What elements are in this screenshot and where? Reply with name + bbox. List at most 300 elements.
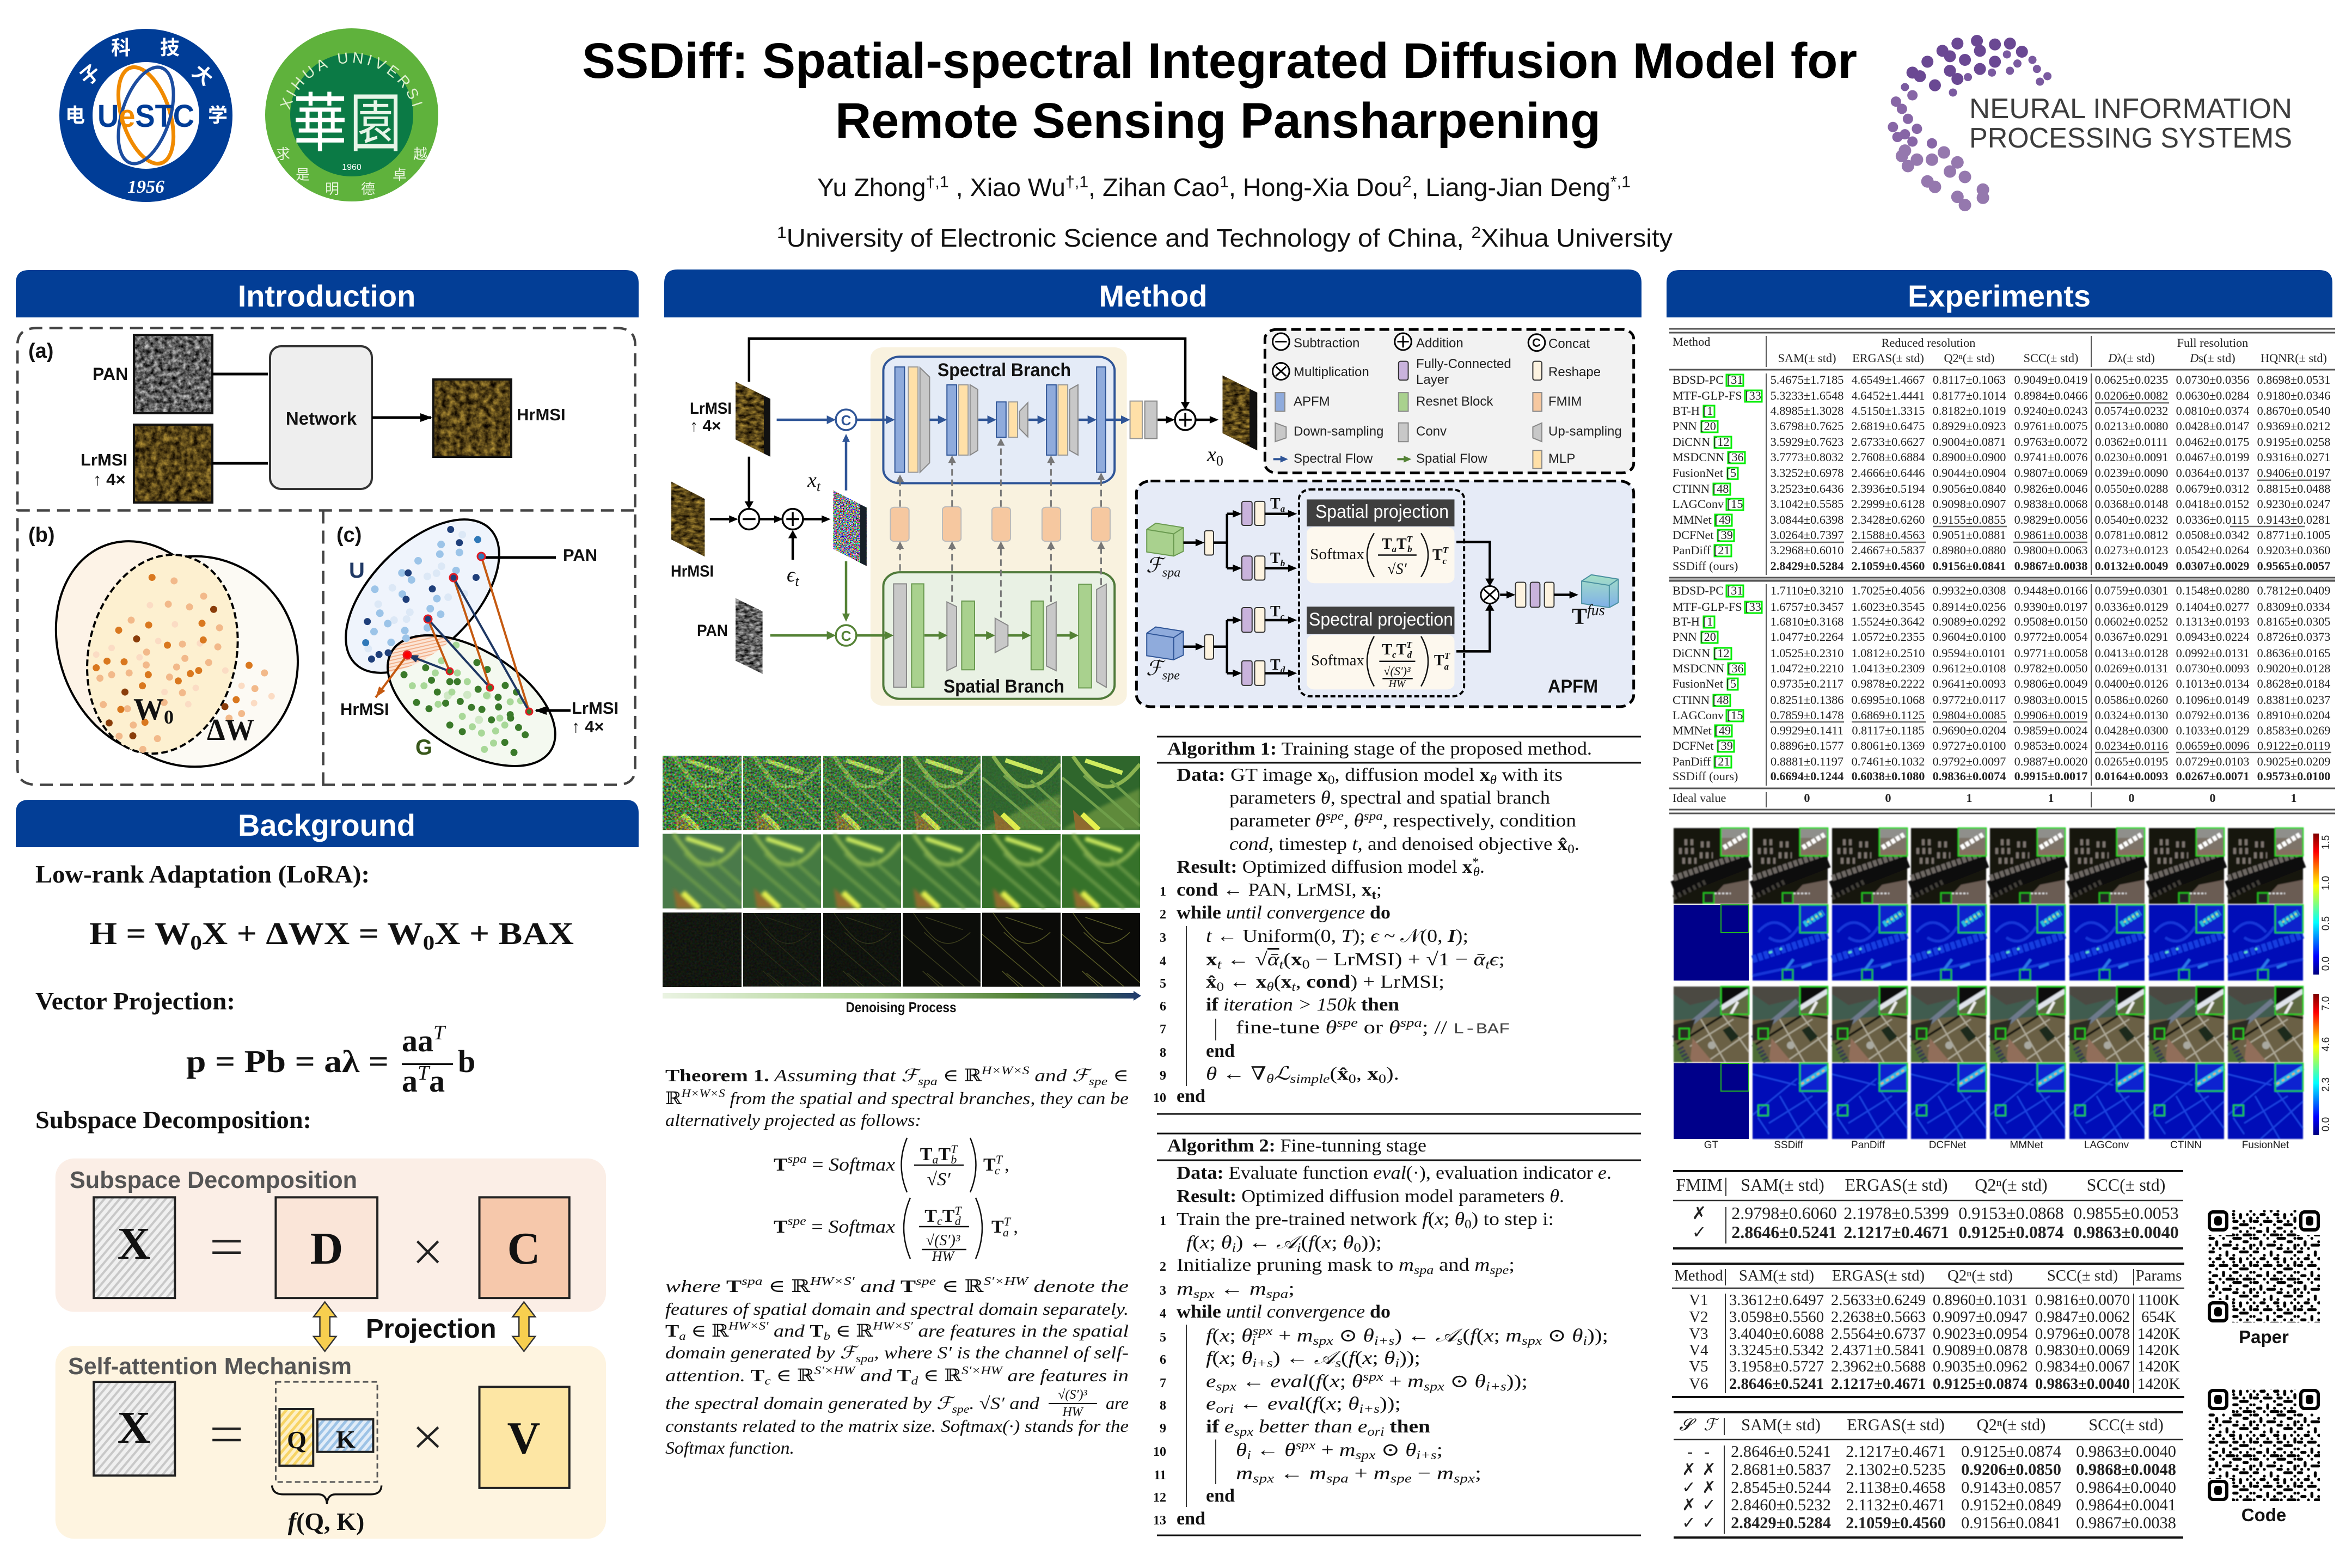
- table: reduced and full resolution results (GF2): 0.8165±0.0305: [2257, 615, 2330, 628]
- Algorithm 2: i: [1583, 1334, 1587, 1347]
- Algorithm 2: i+s: [1252, 1356, 1273, 1370]
- legend box: [1265, 329, 1634, 473]
- logo: Xihua University: 求: [276, 143, 290, 163]
- architecture text labels: APFM: [1294, 394, 1330, 409]
- table: reduced and full resolution results (WV3): 0.9044±0.0904: [1933, 466, 2006, 480]
- table: reduced and full resolution results (WV3): 0.9800±0.0063: [2014, 543, 2087, 557]
- table: variants V1-V6: 3.0598±0.5560: [1729, 1308, 1824, 1326]
- table: reduced and full resolution results (WV3): MSDCNN [36: [1673, 450, 1744, 464]
- table: reduced and full resolution results (WV3): 2.6733±0.6627: [1852, 435, 1925, 449]
- table: reduced and full resolution results (GF2): 0.9641±0.0093: [1933, 677, 2006, 690]
- equations: T: [774, 1217, 788, 1237]
- table: reduced and full resolution results (WV3): 3.0264±0.7397: [1771, 528, 1843, 542]
- table: variants V1-V6: 2.4371±0.5841: [1831, 1342, 1926, 1359]
- Algorithm 2: (: [1341, 1348, 1349, 1368]
- table: reduced and full resolution results (GF2): 0.0943±0.0224: [2176, 630, 2249, 644]
- table: S and F ablation: 0.9206±0.0850: [1961, 1460, 2061, 1479]
- Algorithm 2: spx: [1252, 1324, 1273, 1338]
- table: reduced and full resolution results (GF2): PanDiff [21: [1673, 755, 1730, 768]
- text block: Theorem 1: Theorem 1. Assuming that ℱ: [665, 1065, 891, 1085]
- diagram: subspace decomposition vs self-attention: [56, 1159, 606, 1539]
- vector projection formula: T: [418, 1062, 431, 1085]
- architecture text labels: T: [1396, 536, 1407, 553]
- table: S and F ablation: Q2ⁿ(± std): [1977, 1416, 2045, 1434]
- diagram: subspace decomposition vs self-attention: X: [118, 1402, 150, 1453]
- text block: Theorem 1: HW×S′: [872, 1319, 913, 1332]
- LoRA formula: X + BAX: [434, 916, 574, 951]
- Algorithm 2: 3: [1160, 1284, 1166, 1298]
- logo: Xihua University: 越: [413, 143, 427, 163]
- table: reduced and full resolution results (WV3): 0.9861±0.0038: [2014, 528, 2087, 542]
- Algorithm 2: ) ←: [1273, 1348, 1314, 1368]
- Algorithm 1: end: [1206, 1041, 1235, 1061]
- architecture text labels: C: [841, 412, 852, 428]
- table: variants V1-V6: 0.9830±0.0069: [2035, 1342, 2130, 1359]
- text block: Theorem 1: b: [824, 1330, 830, 1343]
- table: S and F ablation: 2.8460±0.5232: [1731, 1496, 1831, 1514]
- table: reduced and full resolution results (WV3): 0.0418±0.0152: [2176, 497, 2249, 511]
- Algorithm 1: ←: [1224, 972, 1256, 992]
- text block: Theorem 1: alternatively projected as follows:: [665, 1110, 921, 1130]
- table: reduced and full resolution results (WV3): 4.6452±1.4441: [1852, 389, 1925, 402]
- table: reduced and full resolution results (WV3): 0.9195±0.0258: [2257, 435, 2330, 449]
- logo: NeurIPS: NEURAL INFORMATION: [1969, 93, 2292, 125]
- Algorithm 2: i: [1395, 1356, 1399, 1370]
- table: reduced and full resolution results (WV3): 0.0206±0.0082: [2095, 389, 2168, 402]
- method labels: FusionNet: [2242, 1140, 2289, 1151]
- table: variants V1-V6: 0.9816±0.0070: [2035, 1291, 2130, 1309]
- Algorithm 1: t: [1217, 958, 1222, 971]
- sub-panel (c): subspace projections: LrMSI: [572, 699, 618, 718]
- Algorithm 2: spx: [1193, 1287, 1215, 1301]
- table: variants V1-V6: 2.1217±0.4671: [1831, 1375, 1926, 1393]
- Algorithm 2: f(x; θ: [1186, 1233, 1230, 1253]
- table: reduced and full resolution results (WV3): 0.0574±0.0232: [2095, 404, 2168, 418]
- table: reduced and full resolution results (WV3): 0.0550±0.0288: [2095, 482, 2168, 495]
- table: reduced and full resolution results (GF2): 0.9772±0.0117: [1933, 693, 2006, 707]
- APFM box: [1136, 481, 1634, 707]
- table: reduced and full resolution results (GF2): 0.8881±0.1197: [1771, 755, 1843, 768]
- architecture text labels: Spectral Branch: [938, 360, 1071, 381]
- logo: UESTC: [59, 29, 232, 202]
- table: reduced and full resolution results (WV3): CTINN [48: [1673, 482, 1729, 495]
- Algorithm 1: or: [1358, 1018, 1389, 1038]
- table: reduced and full resolution results (GF2): 0.1013±0.0134: [2176, 677, 2249, 690]
- text block: Theorem 1: spa: [742, 1275, 763, 1288]
- Algorithm 1: ℒ: [1274, 1064, 1291, 1084]
- Algorithm 1: θ: [1354, 811, 1364, 831]
- Algorithm 1: t: [1291, 980, 1296, 994]
- vector projection formula: a: [402, 1063, 418, 1099]
- Algorithm 2: ←: [1236, 1371, 1271, 1392]
- Algorithm 2: f(x; m: [1470, 1326, 1519, 1346]
- equations: a: [1003, 1226, 1009, 1239]
- text block: Theorem 1: HW: [1062, 1405, 1084, 1419]
- logo: UESTC: 学: [208, 104, 228, 126]
- table: reduced and full resolution results (GF2): 1.0812±0.2510: [1852, 646, 1925, 660]
- authors: 1: [1220, 173, 1229, 191]
- Algorithm 2: f(x; θ: [1308, 1233, 1352, 1253]
- table: FMIM ablation: 0.9855±0.0053: [2073, 1203, 2179, 1223]
- architecture text labels: LrMSI: [690, 400, 732, 418]
- table: variants V1-V6: 3.4040±0.6088: [1729, 1325, 1824, 1343]
- table: reduced and full resolution results (WV3): 0.8771±0.1005: [2257, 528, 2330, 542]
- table: reduced and full resolution results (GF2): 0.9878±0.2222: [1852, 677, 1925, 690]
- Algorithm 1: t: [1279, 958, 1284, 971]
- text block: Theorem 1: attention. T: [665, 1365, 762, 1385]
- Algorithm 2: spe: [1490, 1263, 1509, 1277]
- architecture text labels: x: [807, 469, 817, 492]
- text block: Theorem 1: S′×HW: [983, 1275, 1030, 1288]
- table: FMIM ablation: ✓: [1692, 1222, 1706, 1242]
- Algorithm 2: θ: [1474, 1371, 1486, 1392]
- Algorithm 1: ,: [1296, 972, 1306, 992]
- architecture text labels: d: [1407, 650, 1412, 660]
- dashed skip connections: [896, 438, 1105, 617]
- equations: T: [920, 1144, 933, 1165]
- table: FMIM ablation: ERGAS(± std): [1845, 1175, 1948, 1195]
- table: variants V1-V6: 1100K: [2137, 1291, 2180, 1309]
- Algorithm 2: spx: [1295, 1438, 1316, 1452]
- Algorithm 2: ));: [1587, 1326, 1608, 1346]
- sub-panel (c): subspace projections: G: [415, 736, 432, 759]
- Algorithm 2: spx: [1522, 1334, 1542, 1347]
- architecture text labels: a: [1392, 544, 1397, 554]
- table: reduced and full resolution results (WV3): 0.9741±0.0076: [2014, 450, 2087, 464]
- text block: Theorem 1: ℝ: [665, 1088, 682, 1108]
- Algorithm 1: ;: [1499, 950, 1505, 970]
- table: reduced and full resolution results (GF2): 0.8726±0.0373: [2257, 630, 2330, 644]
- architecture text labels: T: [1407, 534, 1413, 544]
- table: reduced and full resolution results (GF2): 0.9929±0.1411: [1771, 724, 1843, 737]
- Algorithm 2: ) ←: [1236, 1233, 1276, 1253]
- table: FMIM ablation: ✗: [1692, 1203, 1706, 1223]
- architecture text labels: c: [1392, 650, 1396, 660]
- text block: Theorem 1: are features in the spatial: [913, 1321, 1129, 1340]
- architecture text labels: a: [1444, 661, 1449, 672]
- table: variants V1-V6: 0.9796±0.0078: [2035, 1325, 2130, 1343]
- table: reduced and full resolution results (WV3): Full resolution: [2177, 336, 2248, 350]
- table: reduced and full resolution results (WV3): HQNR(± std): [2261, 351, 2327, 365]
- table: reduced and full resolution results (GF2): 0.1033±0.0129: [2176, 724, 2249, 737]
- table: reduced and full resolution results (WV3): 0.0336±0.0115: [2176, 513, 2249, 526]
- table: FMIM ablation: [1673, 1171, 2183, 1248]
- table: reduced and full resolution results (GF2): 0.9772±0.0054: [2014, 630, 2087, 644]
- Algorithm 2: +: [1383, 1371, 1407, 1392]
- Algorithm 2: ←: [1251, 1440, 1284, 1460]
- logo: UESTC: 电: [65, 104, 85, 126]
- Algorithm 2: ⊙: [1333, 1326, 1363, 1346]
- architecture text labels: HW: [1388, 678, 1407, 690]
- text block: Theorem 1: HW×S′: [810, 1275, 855, 1288]
- Algorithm 2: s: [1457, 1334, 1462, 1347]
- table: reduced and full resolution results (GF2): DCFNet [39: [1673, 739, 1733, 752]
- table: S and F ablation: ✗: [1682, 1496, 1696, 1515]
- text block: Theorem 1: S′×HW: [814, 1364, 856, 1377]
- architecture text labels: t: [817, 479, 821, 494]
- Algorithm 2: and: [1434, 1255, 1474, 1275]
- table: variants V1-V6: [1672, 1264, 2184, 1397]
- table: reduced and full resolution results (GF2): 0.9735±0.2117: [1771, 677, 1843, 690]
- Algorithm 2: 8: [1160, 1399, 1166, 1413]
- colorbars: 0.0: [2320, 957, 2332, 971]
- method labels: MMNet: [2010, 1140, 2043, 1151]
- table: variants V1-V6: V5: [1689, 1358, 1708, 1375]
- Algorithm 2: ;: [1475, 1463, 1481, 1484]
- Algorithm 2: spe: [1391, 1472, 1412, 1485]
- table: reduced and full resolution results (GF2): 1.6810±0.3168: [1771, 615, 1843, 628]
- sub-panel (a): pansharpening pipeline: (a): [28, 340, 53, 363]
- table: S and F ablation: 𝓢: [1679, 1416, 1696, 1434]
- table: reduced and full resolution results (WV3): 0.0781±0.0812: [2095, 528, 2168, 542]
- table: S and F ablation: 2.8646±0.5241: [1731, 1442, 1831, 1461]
- sub-panel (c): subspace projections: ↑ 4×: [572, 717, 604, 736]
- Algorithm 1: x: [1256, 972, 1267, 992]
- Algorithm 1: cond ) + LrMSI;: [1306, 972, 1432, 992]
- table: reduced and full resolution results (GF2): 0.9448±0.0166: [2014, 584, 2087, 597]
- table: reduced and full resolution results (GF2): 0.0759±0.0301: [2095, 584, 2168, 597]
- colorbars: [2313, 834, 2332, 1135]
- table: variants V1-V6: SAM(± std): [1739, 1267, 1814, 1284]
- architecture text labels: b: [1281, 558, 1285, 568]
- Algorithm 2: i: [1297, 1241, 1301, 1254]
- table: reduced and full resolution results (WV3): 2.4666±0.6446: [1852, 466, 1925, 480]
- Algorithm 1: ϵ: [1490, 950, 1499, 970]
- table: reduced and full resolution results (GF2): 0.9932±0.0308: [1933, 584, 2006, 597]
- logo: Xihua University: 園: [350, 71, 402, 164]
- Algorithm 1: ; //: [1422, 1018, 1453, 1038]
- table: reduced and full resolution results (WV3): 3.2523±0.6436: [1771, 482, 1843, 495]
- table: variants V1-V6: 2.5633±0.6249: [1831, 1291, 1926, 1309]
- table: reduced and full resolution results (GF2): 0.9122±0.0119: [2257, 739, 2330, 752]
- equations: T: [951, 1142, 958, 1156]
- text block: Theorem 1: and: [855, 1365, 897, 1385]
- Algorithm 1: 5: [1160, 977, 1166, 991]
- table: reduced and full resolution results (WV3): 0.8670±0.0540: [2257, 404, 2330, 418]
- architecture text labels: b: [1407, 544, 1412, 554]
- table: S and F ablation: ✗: [1702, 1460, 1716, 1479]
- table: reduced and full resolution results (GF2): 0.8583±0.0269: [2257, 724, 2330, 737]
- table: reduced and full resolution results (WV3): 0.0467±0.0199: [2176, 450, 2249, 464]
- table: reduced and full resolution results (GF2): 0.9594±0.0101: [1933, 646, 2006, 660]
- Algorithm 2: i+s: [1374, 1334, 1394, 1347]
- Algorithm 1: 0: [1349, 1072, 1356, 1086]
- Algorithm 2: e: [1206, 1371, 1216, 1392]
- table: reduced and full resolution results (WV3): 0.9240±0.0243: [2014, 404, 2087, 418]
- table: reduced and full resolution results (GF2): MTF-GLP-FS [33: [1673, 600, 1761, 614]
- table: reduced and full resolution results (WV3): 0.0239±0.0090: [2095, 466, 2168, 480]
- Algorithm 2: 𝒜: [1276, 1233, 1303, 1253]
- table: variants V1-V6: 0.8960±0.1031: [1933, 1291, 2028, 1309]
- table: reduced and full resolution results (WV3): 4.5150±1.3315: [1852, 404, 1925, 418]
- table: S and F ablation: -: [1704, 1442, 1710, 1461]
- architecture text labels: fus: [1587, 602, 1605, 619]
- diagram: subspace decomposition vs self-attention: Self-attention Mechanism: [68, 1353, 352, 1380]
- architecture text labels: c: [1443, 556, 1447, 566]
- architecture text labels: Spatial Flow: [1416, 451, 1487, 466]
- table: reduced and full resolution results (WV3): 0.0508±0.0342: [2176, 528, 2249, 542]
- Algorithm 2: end: [1177, 1509, 1205, 1529]
- LoRA formula: 0: [423, 932, 434, 954]
- table: S and F ablation: 2.8681±0.5837: [1731, 1460, 1831, 1479]
- Algorithm 1: ,: [1356, 1064, 1367, 1084]
- table: FMIM ablation: 0.9863±0.0040: [2073, 1222, 2179, 1242]
- table: reduced and full resolution results (GF2): 0.0602±0.0252: [2095, 615, 2168, 628]
- Algorithm 2: m: [1339, 1440, 1356, 1460]
- LoRA formula: X + ΔWX = W: [202, 916, 423, 951]
- architecture text labels: T: [1572, 604, 1587, 629]
- table: reduced and full resolution results (WV3): 2.6819±0.6475: [1852, 419, 1925, 433]
- heading: Method: [664, 270, 1641, 317]
- Algorithm 1: 10: [1153, 1091, 1166, 1105]
- diagram: SSDiff architecture: [671, 329, 1634, 707]
- table: reduced and full resolution results (GF2): 0.9859±0.0024: [2014, 724, 2087, 737]
- diagram: subspace decomposition vs self-attention: X: [118, 1218, 150, 1269]
- table: reduced and full resolution results (GF2): MMNet [49: [1673, 724, 1731, 737]
- text block: Theorem 1: [665, 1064, 1129, 1457]
- architecture text labels: 0: [1216, 453, 1223, 469]
- sub-panel (b): LoRA weight sets: (b): [28, 524, 55, 547]
- architecture text labels: spe: [1162, 669, 1180, 683]
- Algorithm 2: ;: [1288, 1279, 1295, 1299]
- table: S and F ablation: ✗: [1702, 1478, 1716, 1497]
- table: reduced and full resolution results (GF2): 0.8628±0.0184: [2257, 677, 2330, 690]
- Algorithm 1: θ ← ∇: [1206, 1064, 1258, 1084]
- Algorithm 1: t: [1485, 958, 1490, 971]
- equations: T: [1004, 1215, 1012, 1228]
- table: reduced and full resolution results (GF2): 0: [1885, 791, 1891, 805]
- vector projection formula: b: [458, 1044, 475, 1079]
- table: S and F ablation: 0.9868±0.0048: [2076, 1460, 2176, 1479]
- table: reduced and full resolution results (GF2): 0.9803±0.0015: [2014, 693, 2087, 707]
- text block: Theorem 1: spa: [918, 1075, 938, 1088]
- Algorithm 1: spe: [1337, 1016, 1358, 1030]
- Algorithm 1: 0: [1217, 980, 1224, 994]
- Algorithm 2: +: [1273, 1326, 1297, 1346]
- Algorithm 2: ;: [1437, 1440, 1443, 1460]
- table: FMIM ablation: 2.8646±0.5241: [1731, 1222, 1837, 1242]
- table: reduced and full resolution results (WV3): 3.3252±0.6978: [1771, 466, 1843, 480]
- table: reduced and full resolution results (WV3): ERGAS(± std): [1852, 351, 1924, 365]
- table: reduced and full resolution results (WV3): 0.9369±0.0212: [2257, 419, 2330, 433]
- table: reduced and full resolution results (GF2): [1669, 578, 2335, 813]
- Algorithm 1: .: [1575, 834, 1579, 854]
- table: reduced and full resolution results (WV3): 0.9316±0.0271: [2257, 450, 2330, 464]
- table: reduced and full resolution results (WV3): 0.0428±0.0147: [2176, 419, 2249, 433]
- text block: Theorem 1: d: [911, 1374, 918, 1387]
- text block: Theorem 1: the spectral domain generated by ℱ: [665, 1393, 917, 1413]
- table: reduced and full resolution results (GF2): 1: [2290, 791, 2297, 805]
- text block: Theorem 1: ∈ ℝ: [918, 1365, 962, 1385]
- heading: Background: Background: [238, 808, 415, 842]
- Algorithm 2: ⊙: [1542, 1326, 1572, 1346]
- figure: denoising process grid: [661, 755, 1141, 1015]
- vector projection formula: aa: [402, 1023, 433, 1058]
- text block: Theorem 1: spe: [1089, 1075, 1107, 1088]
- Algorithm 2: θ: [1405, 1440, 1416, 1460]
- table: reduced and full resolution results (WV3): 0.9829±0.0056: [2014, 513, 2087, 526]
- architecture text labels: T: [1406, 640, 1412, 650]
- table: reduced and full resolution results (GF2): 0.8117±0.1185: [1852, 724, 1925, 737]
- Algorithm 1: cond, timestep t, and denoised objective x̂: [1229, 834, 1567, 854]
- table: reduced and full resolution results (WV3): 2.1588±0.4563: [1852, 528, 1925, 542]
- architecture text labels: Softmax: [1311, 652, 1364, 669]
- table: reduced and full resolution results (GF2): 0.9853±0.0024: [2014, 739, 2087, 752]
- table: reduced and full resolution results (GF2): 0.9727±0.0100: [1933, 739, 2006, 752]
- heading: Experiments: Experiments: [1908, 279, 2091, 313]
- logo: UESTC: 科: [111, 36, 131, 59]
- table: S and F ablation: 2.1138±0.4658: [1846, 1478, 1945, 1497]
- vector projection formula: p = Pb = aλ =: [186, 1044, 389, 1079]
- Algorithm 1: end: [1177, 1086, 1205, 1106]
- Algorithm 2: spx: [1313, 1334, 1334, 1347]
- table: reduced and full resolution results (GF2): 1.6757±0.3457: [1771, 600, 1843, 614]
- table: reduced and full resolution results (WV3): 0.9051±0.0881: [1933, 528, 2006, 542]
- table: S and F ablation: ✓: [1682, 1478, 1696, 1497]
- table: reduced and full resolution results (GF2): 0.9690±0.0204: [1933, 724, 2006, 737]
- table: reduced and full resolution results (GF2): 0.9915±0.0017: [2014, 769, 2087, 783]
- Algorithm 1: 0: [1328, 773, 1334, 787]
- table: reduced and full resolution results (WV3): 0.0364±0.0137: [2176, 466, 2249, 480]
- authors: 2: [1402, 173, 1412, 191]
- table: S and F ablation: ℱ: [1704, 1416, 1719, 1434]
- table: reduced and full resolution results (GF2): 0: [1804, 791, 1810, 805]
- Algorithm 1: 7: [1160, 1022, 1166, 1037]
- table: S and F ablation: 0.9152±0.0849: [1961, 1496, 2061, 1514]
- table: reduced and full resolution results (WV3): 0.8177±0.1014: [1933, 389, 2006, 402]
- method labels: PanDiff: [1851, 1140, 1885, 1151]
- table: reduced and full resolution results (GF2): 0.0324±0.0130: [2095, 708, 2168, 722]
- Algorithm 2: m: [1437, 1463, 1454, 1484]
- Algorithm 2: m: [1474, 1255, 1490, 1275]
- table: reduced and full resolution results (WV3): Method: [1673, 335, 1710, 348]
- table: reduced and full resolution results (GF2): MSDCNN [36: [1673, 661, 1744, 675]
- sub-panel (a): pansharpening pipeline: PAN: [93, 364, 128, 384]
- Algorithm 1: (: [1330, 1064, 1337, 1084]
- table: reduced and full resolution results (WV3): DiCNN [12: [1673, 435, 1730, 449]
- table: reduced and full resolution results (WV3): 0.9180±0.0346: [2257, 389, 2330, 402]
- table: reduced and full resolution results (GF2): 0.7859±0.1478: [1771, 708, 1843, 722]
- authors: †,1: [1065, 173, 1088, 191]
- Algorithm 2: 11: [1154, 1468, 1166, 1483]
- Algorithm 2: m: [1309, 1463, 1326, 1484]
- text block: Theorem 1: from the spatial and spectral branches, they can be: [725, 1088, 1129, 1108]
- architecture text labels: T: [1270, 603, 1281, 620]
- Algorithm 1: θ: [1473, 865, 1480, 879]
- Algorithm 1: x: [1480, 765, 1490, 785]
- table: S and F ablation: 2.1059±0.4560: [1846, 1514, 1946, 1532]
- Algorithm 2: s: [1335, 1356, 1341, 1370]
- authors: , Liang-Jian Deng: [1412, 173, 1610, 201]
- table: reduced and full resolution results (WV3): Ds(± std): [2190, 351, 2235, 365]
- table: variants V1-V6: 0.9834±0.0067: [2035, 1358, 2130, 1375]
- Algorithm 1: x̂: [1206, 972, 1217, 992]
- sub-panel (a): pansharpening pipeline: [28, 335, 566, 503]
- table: reduced and full resolution results (WV3): 3.0844±0.6398: [1771, 513, 1843, 526]
- Algorithm 1: parameter θ: [1229, 811, 1325, 831]
- sub-panel (c): subspace projections: U: [349, 559, 365, 583]
- table: reduced and full resolution results (GF2): PNN [20: [1673, 630, 1716, 644]
- table: reduced and full resolution results (WV3): 0.0307±0.0029: [2176, 559, 2249, 573]
- authors: , Zihan Cao: [1088, 173, 1220, 201]
- table: reduced and full resolution results (GF2): 0.0234±0.0116: [2095, 739, 2168, 752]
- table: reduced and full resolution results (WV3): 0.0810±0.0374: [2176, 404, 2249, 418]
- table: reduced and full resolution results (WV3): 2.3428±0.6260: [1852, 513, 1925, 526]
- table: reduced and full resolution results (WV3): 4.6549±1.4667: [1852, 373, 1925, 387]
- table: variants V1-V6: ERGAS(± std): [1832, 1267, 1925, 1284]
- table: reduced and full resolution results (WV3): Dλ(± std): [2108, 351, 2155, 365]
- table: variants V1-V6: 2.5564±0.6737: [1831, 1325, 1926, 1343]
